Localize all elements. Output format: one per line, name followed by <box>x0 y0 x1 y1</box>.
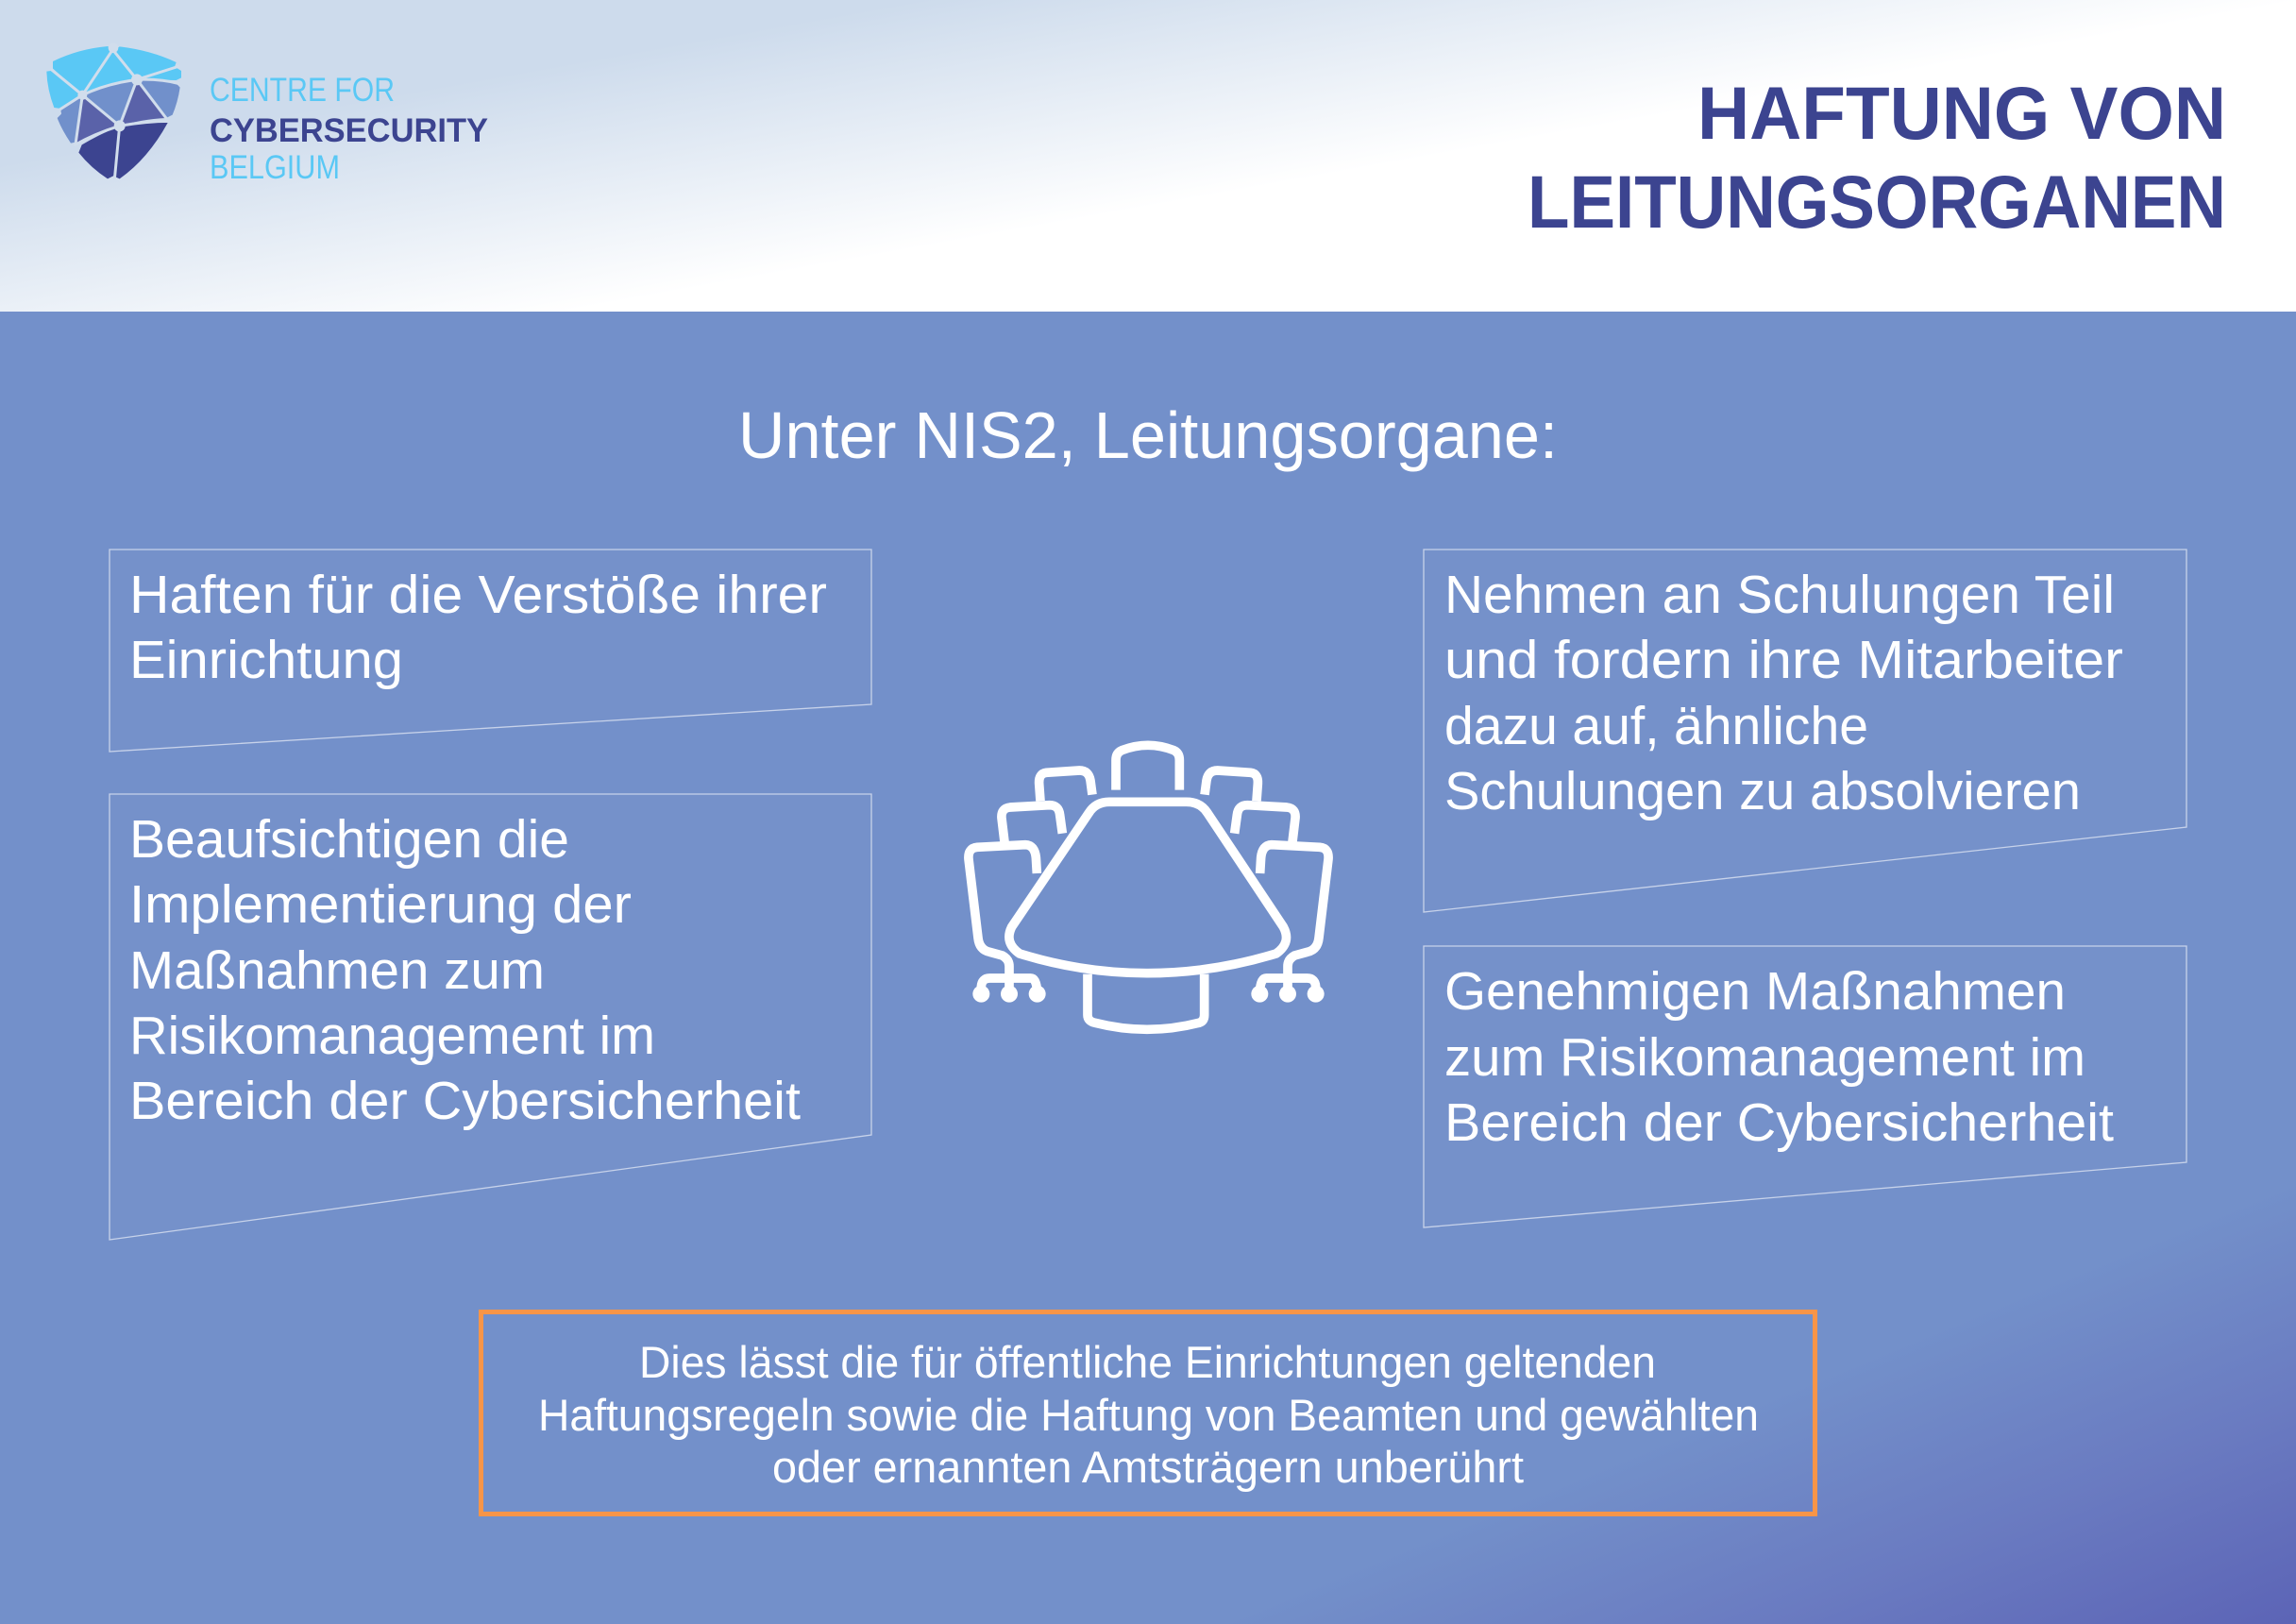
panel: approval box: Bereich der Cybersicherheit <box>1444 1092 2114 1153</box>
logo wordmark <box>210 72 488 186</box>
callout: public-sector note: oder ernannten Amtsträgern unberührt <box>772 1442 1524 1492</box>
icon: boardroom table with chairs <box>969 745 1328 1029</box>
title: HAFTUNG VON <box>1697 71 2226 155</box>
panel: liability box: Einrichtung <box>129 630 403 690</box>
panel: approval box: zum Risikomanagement im <box>1444 1027 2085 1088</box>
callout: public-sector note <box>481 1312 1815 1514</box>
logo: Centre for Cybersecurity Belgium <box>46 42 488 186</box>
title <box>1528 71 2226 244</box>
panel: training box: Nehmen an Schulungen Teil <box>1444 565 2115 625</box>
panel: training box: dazu auf, ähnliche <box>1444 696 1868 756</box>
title: LEITUNGSORGANEN <box>1528 160 2226 244</box>
icon: shield network mark <box>46 42 181 179</box>
panel: approval box: Genehmigen Maßnahmen <box>1444 961 2066 1022</box>
callout: public-sector note: Dies lässt die für öffentliche Einrichtungen geltenden <box>639 1337 1656 1387</box>
panel: oversight box <box>110 794 871 1240</box>
subheading: Unter NIS2, Leitungsorgane: <box>738 398 1558 472</box>
panel: approval box <box>1424 946 2186 1227</box>
panel: liability box <box>110 550 871 752</box>
panel: training box <box>1424 550 2186 912</box>
panel: oversight box: Risikomanagement im <box>129 1006 655 1066</box>
panel: oversight box: Bereich der Cybersicherheit <box>129 1071 801 1131</box>
callout: public-sector note: Haftungsregeln sowie die Haftung von Beamten und gewählten <box>538 1390 1759 1440</box>
logo wordmark: CYBERSECURITY <box>210 112 488 149</box>
panel: oversight box: Beaufsichtigen die <box>129 809 569 870</box>
logo wordmark: BELGIUM <box>210 149 340 186</box>
panel: training box: Schulungen zu absolvieren <box>1444 761 2081 821</box>
panel: liability box: Haften für die Verstöße ihrer <box>129 565 827 625</box>
panel: training box: und fordern ihre Mitarbeiter <box>1444 630 2123 690</box>
logo wordmark: CENTRE FOR <box>210 72 395 109</box>
panel: oversight box: Implementierung der <box>129 874 632 935</box>
header band <box>0 0 2296 312</box>
panel: oversight box: Maßnahmen zum <box>129 940 545 1001</box>
